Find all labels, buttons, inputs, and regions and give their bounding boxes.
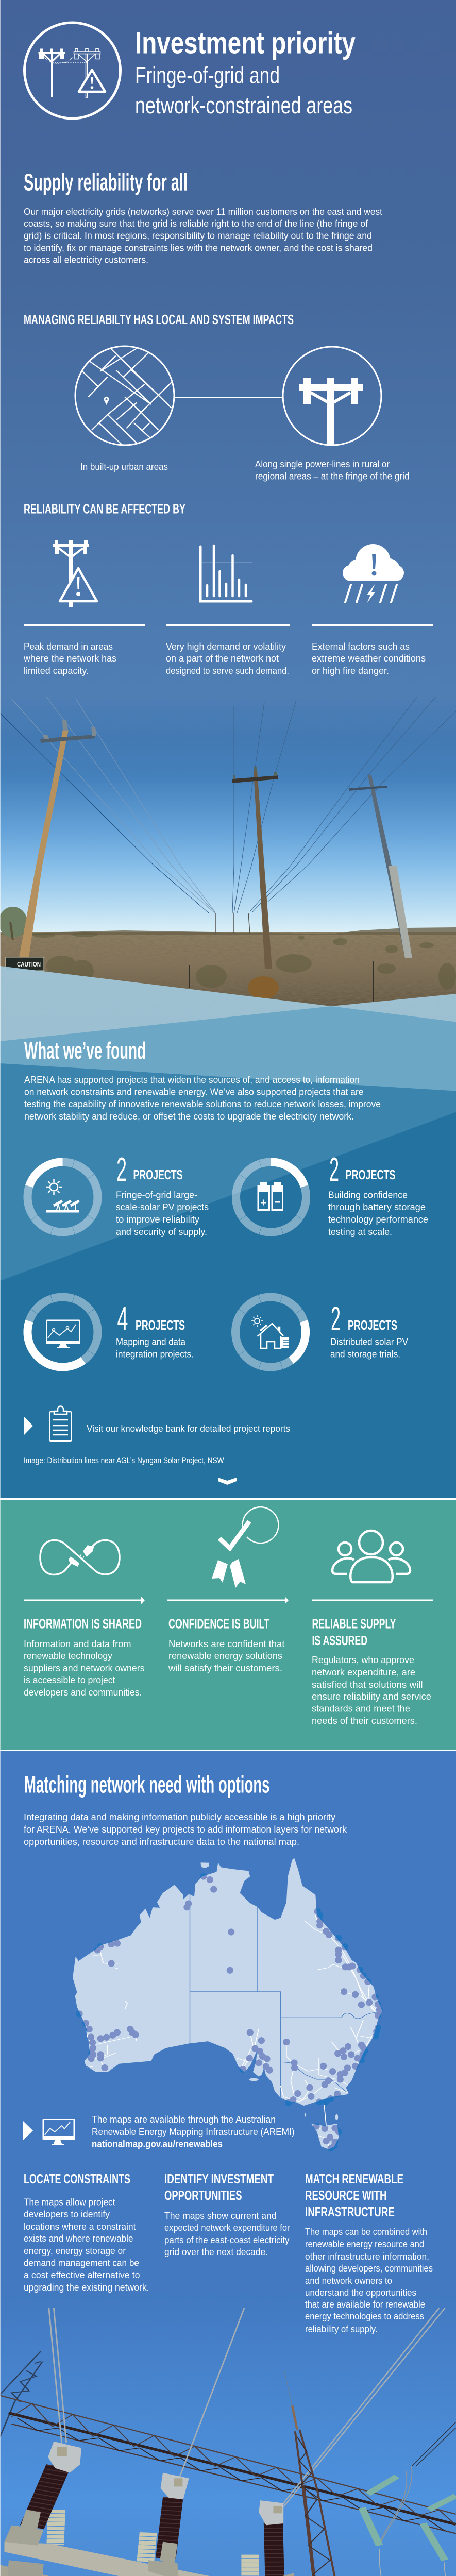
stat: 2 projects solar: Fringe-of-grid large- bbox=[116, 1190, 197, 1200]
icon: monitor bbox=[43, 2120, 75, 2145]
panel: matching network background bbox=[0, 1751, 456, 2576]
column: reliable supply is assured bbox=[312, 1616, 431, 1726]
column: locate constraints: exists and where renewable bbox=[24, 2233, 133, 2244]
column: confidence is built: will satisfy their customers. bbox=[168, 1663, 282, 1673]
column: reliable supply is assured: needs of their customers. bbox=[312, 1716, 417, 1726]
icon: chevron bbox=[218, 1478, 237, 1485]
column: reliable supply is assured: standards and meet the bbox=[312, 1703, 410, 1714]
stat: 4 projects mapping: 4 bbox=[117, 1299, 128, 1337]
column: match renewable resource: RESOURCE WITH bbox=[305, 2188, 386, 2203]
text: AREMI maps link bbox=[92, 2114, 295, 2149]
column: information is shared: renewable technology bbox=[24, 1651, 112, 1661]
column: match renewable resource: understand the opportunities bbox=[305, 2287, 416, 2298]
column: locate constraints: a cost effective alternative to bbox=[24, 2270, 140, 2280]
ring chart: distributed solar and storage bbox=[226, 1288, 315, 1376]
column: identify investment opportunities: IDENTIFY INVESTMENT bbox=[164, 2171, 274, 2187]
icon: single power pole circle bbox=[283, 347, 381, 445]
photo: distribution lines near Nyngan Solar Project bbox=[0, 697, 456, 1050]
text block: very high demand: on a part of the network not bbox=[166, 653, 279, 664]
icon: header poles with warning in circle bbox=[25, 23, 121, 118]
title: Investment priority bbox=[135, 26, 356, 60]
text block: supply reliability intro bbox=[24, 207, 382, 265]
caption: along single power lines: regional areas – at the fringe of the grid bbox=[255, 471, 409, 481]
column: match renewable resource: renewable energy resource and bbox=[305, 2239, 424, 2249]
arrow: knowledge bank pointer bbox=[24, 1416, 33, 1435]
sub: truss beam bbox=[0, 2396, 456, 2533]
icon: people group bbox=[332, 1531, 410, 1582]
icon: urban street map circle bbox=[75, 346, 174, 445]
arrow: information to confidence bbox=[24, 1597, 145, 1604]
text: visit knowledge bank: Visit our knowledge bank for detailed project reports bbox=[87, 1423, 290, 1434]
column: locate constraints bbox=[24, 2171, 149, 2293]
column: match renewable resource: MATCH RENEWABLE bbox=[305, 2171, 403, 2187]
column: identify investment opportunities: expected network expenditure for bbox=[164, 2223, 290, 2233]
stat: 2 projects battery: PROJECTS bbox=[345, 1167, 396, 1182]
page left edge hairline bbox=[0, 0, 1, 2576]
column: information is shared: suppliers and network owners bbox=[24, 1663, 144, 1673]
title: network-constrained areas bbox=[135, 92, 352, 118]
sub: ceramic stacks bbox=[55, 2510, 250, 2576]
arrow: maps pointer bbox=[23, 2121, 33, 2140]
arrow: confidence to reliable supply bbox=[167, 1597, 289, 1604]
column: reliable supply is assured: RELIABLE SUPPLY bbox=[312, 1616, 396, 1631]
column: information is shared bbox=[24, 1616, 144, 1698]
text: AREMI maps link: nationalmap.gov.au/renewables bbox=[92, 2139, 223, 2149]
heading: matching network need: Matching network need with options bbox=[24, 1771, 270, 1798]
stat: 2 projects battery bbox=[328, 1150, 428, 1237]
text block: peak demand: where the network has bbox=[23, 653, 116, 664]
stat: 4 projects mapping: integration projects. bbox=[116, 1349, 194, 1359]
text block: very high demand: designed to serve such demand. bbox=[166, 666, 289, 676]
stat: 4 projects mapping bbox=[116, 1299, 194, 1359]
sub: central lattice tower bbox=[284, 2371, 375, 2576]
text block: supply reliability intro: to identify, fix or manage constraints lies with the network owner, and the cost is shared bbox=[24, 243, 373, 253]
text block: matching intro: opportunities, resource and infrastructure data to the national map. bbox=[24, 1837, 299, 1847]
column: reliable supply is assured: network expenditure, are bbox=[312, 1667, 415, 1677]
stat: 2 projects solar bbox=[116, 1150, 209, 1237]
caution sign: CAUTION bbox=[17, 960, 41, 968]
column: reliable supply is assured: Regulators, who approve bbox=[312, 1655, 414, 1665]
panel: supply reliability background with sky photo bbox=[0, 0, 456, 935]
stat: 2 projects battery: technology performance bbox=[328, 1214, 428, 1225]
stat: 2 projects solar: and security of supply. bbox=[116, 1227, 207, 1237]
stat: 2 projects distributed: 2 bbox=[331, 1299, 341, 1337]
text block: very high demand: Very high demand or volatility bbox=[166, 641, 286, 652]
column: match renewable resource bbox=[305, 2171, 433, 2334]
stat: 2 projects distributed bbox=[330, 1299, 408, 1359]
icon: bar chart demand bbox=[200, 546, 252, 601]
text block: what we've found intro: network stability and reduce, or offset the costs to upgrade the electricity network. bbox=[24, 1111, 354, 1122]
heading: supply reliability for all: Supply reliability for all bbox=[24, 169, 188, 196]
text block: external factors: External factors such as bbox=[312, 641, 410, 652]
icon: infinity plug bbox=[40, 1540, 120, 1575]
column: locate constraints: The maps allow project bbox=[24, 2197, 115, 2207]
column: confidence is built bbox=[168, 1616, 284, 1673]
stat: 2 projects battery: Building confidence bbox=[328, 1190, 408, 1200]
column: confidence is built: Networks are confident that bbox=[168, 1639, 284, 1649]
column: locate constraints: energy, energy storage or bbox=[24, 2246, 126, 2256]
text block: supply reliability intro: coasts, so making sure that the grid is reliable right to the end of the line (the fringe of bbox=[24, 218, 368, 229]
photo: substation with insulators and lattice towers bbox=[0, 2308, 456, 2576]
panel: what we've found background bbox=[0, 1063, 456, 1498]
stat: 2 projects battery: through battery storage bbox=[328, 1202, 426, 1212]
stat: 2 projects distributed: Distributed solar PV bbox=[330, 1336, 408, 1347]
column: identify investment opportunities: grid over the next decade. bbox=[164, 2247, 268, 2257]
column: identify investment opportunities: OPPORTUNITIES bbox=[164, 2188, 242, 2203]
heading: what we've found: What we’ve found bbox=[24, 1037, 146, 1064]
stat: 4 projects mapping: Mapping and data bbox=[116, 1336, 186, 1347]
stat: 2 projects battery: testing at scale. bbox=[328, 1227, 392, 1237]
ring chart: mapping projects bbox=[14, 1283, 111, 1381]
stat: 2 projects battery: 2 bbox=[329, 1150, 339, 1188]
heading: managing reliability: MANAGING RELIABILTY HAS LOCAL AND SYSTEM IMPACTS bbox=[24, 312, 294, 327]
title: Fringe-of-grid and bbox=[135, 62, 280, 89]
caption: along single power lines bbox=[255, 459, 409, 481]
column: match renewable resource: The maps can be combined with bbox=[305, 2227, 427, 2237]
panel: teal outcomes bbox=[0, 1500, 456, 1750]
sub: left distant tower bbox=[0, 2351, 42, 2437]
text block: supply reliability intro: Our major electricity grids (networks) serve over 11 million customers on the east and west bbox=[24, 207, 382, 217]
overlay: light triangle bands bbox=[0, 966, 456, 1095]
text block: peak demand: limited capacity. bbox=[24, 666, 89, 676]
text block: matching intro: for ARENA. We’ve supported key projects to add information layers for network bbox=[24, 1824, 347, 1835]
column: reliable supply is assured: satisfied that solutions will bbox=[312, 1680, 423, 1690]
stat: 2 projects solar: 2 bbox=[116, 1150, 127, 1188]
text block: peak demand bbox=[23, 641, 116, 676]
stat: 2 projects solar: to improve reliability bbox=[116, 1214, 199, 1225]
map: Australia with project dots and transmission lines bbox=[73, 1858, 383, 2151]
sub: overhead wires bbox=[49, 2308, 456, 2576]
caption: built-up urban areas: In built-up urban areas bbox=[80, 462, 168, 472]
text block: external factors bbox=[312, 641, 426, 676]
ring chart: solar PV projects bbox=[19, 1153, 107, 1241]
column: information is shared: INFORMATION IS SHARED bbox=[24, 1616, 142, 1631]
caption: along single power lines: Along single power-lines in rural or bbox=[255, 459, 390, 469]
title bbox=[135, 26, 356, 118]
heading: reliability can be affected by: RELIABILITY CAN BE AFFECTED BY bbox=[24, 501, 185, 516]
overlay: medium blue band bbox=[0, 1006, 456, 1095]
text block: matching intro bbox=[24, 1812, 347, 1847]
icon: pole with warning triangle bbox=[53, 540, 97, 607]
column: locate constraints: LOCATE CONSTRAINTS bbox=[24, 2171, 130, 2187]
icon: clipboard bbox=[49, 1406, 71, 1441]
column: locate constraints: upgrading the existing network. bbox=[24, 2282, 149, 2293]
column: identify investment opportunities: parts of the east-coast electricity bbox=[164, 2235, 290, 2245]
text block: what we've found intro: testing the capability of innovative renewable solutions to reduce network losses, improve bbox=[24, 1099, 381, 1109]
column: match renewable resource: and network owners to bbox=[305, 2276, 392, 2286]
column: confidence is built: renewable energy solutions bbox=[168, 1651, 282, 1661]
stat: 2 projects solar: PROJECTS bbox=[133, 1167, 182, 1182]
column: reliable supply is assured: IS ASSURED bbox=[312, 1633, 367, 1648]
column: confidence is built: CONFIDENCE IS BUILT bbox=[168, 1616, 269, 1631]
sub: green glass insulators bbox=[362, 2477, 456, 2560]
column: match renewable resource: reliability of supply. bbox=[305, 2324, 377, 2334]
sub: insulator caps bbox=[48, 2442, 283, 2525]
column: match renewable resource: allowing developers, communities bbox=[305, 2263, 433, 2274]
sub: grey frames and beams bbox=[0, 2510, 295, 2576]
sub: dark brown insulators bbox=[32, 2466, 275, 2576]
column: information is shared: developers and communities. bbox=[24, 1687, 142, 1698]
column: match renewable resource: INFRASTRUCTURE bbox=[305, 2204, 395, 2219]
text block: what we've found intro: ARENA has supported projects that widen the sources of, and access to, information bbox=[24, 1075, 360, 1085]
text: image caption: Image: Distribution lines near AGL’s Nyngan Solar Project, NSW bbox=[24, 1456, 224, 1465]
column: match renewable resource: that are available for renewable bbox=[305, 2299, 425, 2310]
column: identify investment opportunities bbox=[164, 2171, 290, 2257]
column: reliable supply is assured: ensure reliability and service bbox=[312, 1691, 431, 1702]
stat: 2 projects distributed: and storage trials. bbox=[330, 1349, 400, 1359]
stat: 2 projects distributed: PROJECTS bbox=[348, 1317, 397, 1333]
icon: storm cloud bbox=[343, 544, 404, 603]
text block: supply reliability intro: grid) is critical. In most regions, responsibility to manage reliability out to the fringe and bbox=[24, 231, 372, 241]
text block: matching intro: Integrating data and making information publicly accessible is a high priority bbox=[24, 1812, 335, 1822]
column: information is shared: Information and data from bbox=[24, 1639, 131, 1649]
text block: external factors: or high fire danger. bbox=[312, 666, 389, 676]
text: AREMI maps link: Renewable Energy Mapping Infrastructure (AREMI) bbox=[92, 2127, 295, 2137]
connector line between circles bbox=[175, 397, 283, 398]
divider bbox=[312, 1599, 433, 1601]
text block: what we've found intro bbox=[24, 1075, 381, 1122]
overlay: dark diagonal bbox=[0, 1112, 456, 1498]
column: match renewable resource: other infrastructure information, bbox=[305, 2251, 429, 2262]
stat: 4 projects mapping: PROJECTS bbox=[136, 1317, 185, 1333]
column: locate constraints: demand management can be bbox=[24, 2258, 139, 2268]
ring chart: battery storage projects bbox=[236, 1162, 306, 1232]
text block: peak demand: Peak demand in areas bbox=[24, 641, 113, 652]
text block: what we've found intro: on network constraints and renewable energy. We’ve also supported projects that are bbox=[24, 1087, 364, 1097]
column: locate constraints: locations where a constraint bbox=[24, 2222, 136, 2232]
text: AREMI maps link: The maps are available through the Australian bbox=[92, 2114, 276, 2125]
column: match renewable resource: energy technologies to address bbox=[305, 2311, 424, 2321]
divider column rules bbox=[24, 624, 433, 626]
column: locate constraints: developers to identify bbox=[24, 2209, 110, 2219]
column: identify investment opportunities: The maps show current and bbox=[164, 2211, 276, 2221]
text block: external factors: extreme weather conditions bbox=[312, 653, 426, 664]
icon: rosette with check bbox=[212, 1507, 279, 1588]
column: information is shared: is accessible to project bbox=[24, 1675, 115, 1685]
caution sign bbox=[6, 957, 44, 971]
stat: 2 projects solar: scale-solar PV projects bbox=[116, 1202, 209, 1212]
text block: very high demand bbox=[166, 641, 289, 676]
text block: supply reliability intro: across all electricity customers. bbox=[24, 255, 148, 265]
